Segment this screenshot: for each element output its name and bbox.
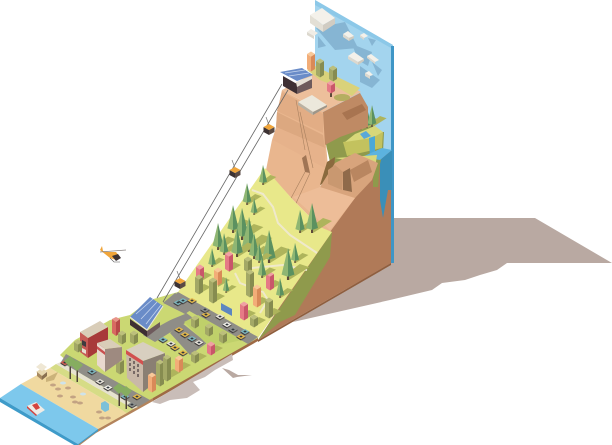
boxy trees upper xyxy=(195,252,274,304)
park boxes xyxy=(175,316,227,372)
water xyxy=(0,384,98,445)
ground edge strip xyxy=(153,338,258,401)
lifeguard tower xyxy=(36,363,58,382)
forest slope xyxy=(178,168,332,338)
slope paths xyxy=(235,190,317,313)
hotel side trees xyxy=(148,354,171,392)
parked cars xyxy=(158,298,250,356)
terraces and waterfall xyxy=(325,105,392,172)
building: pink shop xyxy=(97,339,122,372)
beach edge xyxy=(78,398,153,445)
seaside road xyxy=(56,354,150,409)
helicopter xyxy=(100,246,126,262)
cliff xyxy=(266,90,378,232)
park island xyxy=(184,315,242,347)
brown side of mountain xyxy=(258,150,392,342)
plateau boxes xyxy=(307,52,337,97)
lower forest trees xyxy=(223,248,309,298)
red column xyxy=(112,317,120,336)
bottom cable car station xyxy=(130,297,163,337)
seaside promenade xyxy=(50,364,133,413)
helicopter shadow xyxy=(222,368,252,378)
billboard xyxy=(221,303,232,316)
clouds on wall xyxy=(307,8,382,88)
beach umbrellas xyxy=(50,382,111,420)
plateau top xyxy=(282,66,361,112)
city green boxes xyxy=(74,330,138,374)
palm trees xyxy=(64,356,132,409)
beach sand xyxy=(21,368,127,429)
forest trees xyxy=(208,165,332,267)
boat xyxy=(27,402,45,416)
cast shadow of mountain xyxy=(293,218,612,322)
street cars xyxy=(60,360,142,408)
top cable car station xyxy=(280,68,313,94)
boxy trees lower xyxy=(240,284,273,328)
gondolas xyxy=(174,117,274,289)
roads and parking lots xyxy=(143,292,258,355)
building: red brick xyxy=(80,321,108,358)
ground shadows of boxy trees xyxy=(166,262,282,380)
building: large hotel xyxy=(126,342,165,392)
blue sky wall xyxy=(315,0,394,263)
front shadow on ground xyxy=(152,354,233,404)
white rooftop building xyxy=(298,95,327,115)
lower flat ground xyxy=(60,292,258,414)
cable lines xyxy=(157,84,288,302)
